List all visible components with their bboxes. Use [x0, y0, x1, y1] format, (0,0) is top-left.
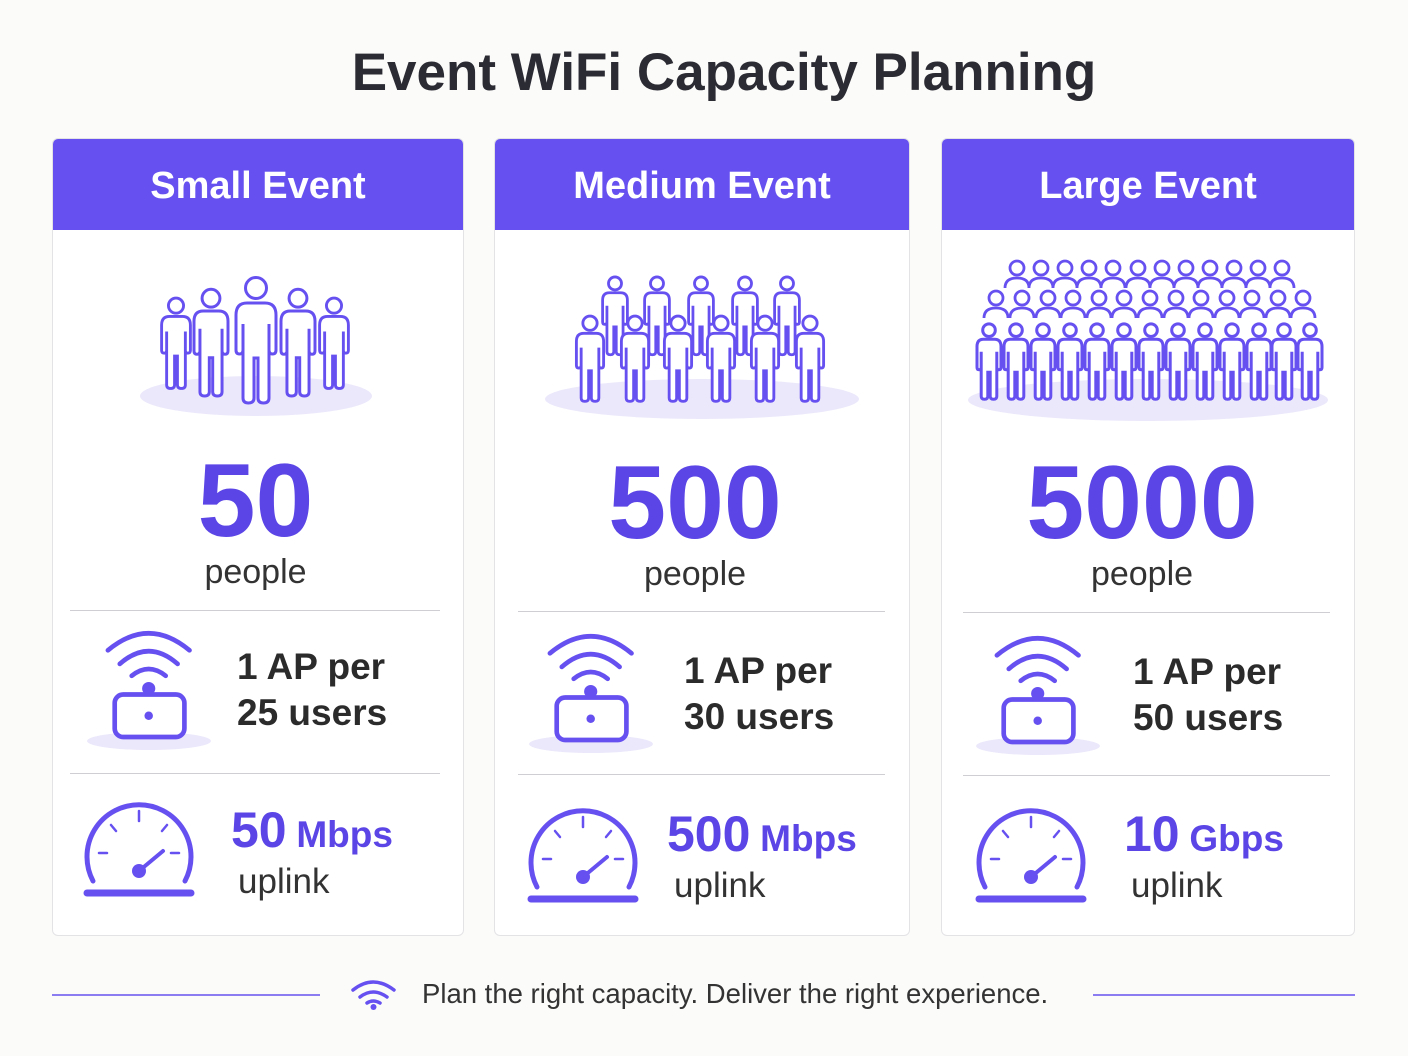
icon: access point — [87, 630, 211, 750]
icon: access point — [529, 634, 653, 753]
text: uplink: 10 Gbps — [1124, 806, 1284, 862]
text: uplink: 500 Mbps — [667, 806, 857, 862]
number: 5000 people: 5000 — [1026, 445, 1258, 561]
text: AP ratio: 50 users — [1133, 697, 1283, 738]
number: 50 people: 50 — [198, 443, 313, 559]
text: uplink: uplink — [1131, 866, 1222, 905]
icon: footer wifi — [351, 980, 396, 1010]
panel: medium event — [494, 138, 910, 936]
text: AP ratio: 1 AP per — [237, 646, 385, 687]
number: 5000 people: people — [1091, 555, 1193, 593]
icon: speed gauge — [976, 808, 1086, 902]
header: medium — [495, 139, 909, 230]
text: uplink: uplink — [674, 866, 765, 905]
text: AP ratio — [237, 646, 387, 733]
header: small: Small Event — [150, 165, 366, 207]
text: uplink — [1124, 806, 1284, 905]
header: small — [53, 139, 463, 230]
icon: speed gauge — [528, 808, 638, 902]
header: medium: Medium Event — [573, 165, 831, 207]
text: AP ratio: 1 AP per — [684, 650, 832, 691]
text: uplink: 50 Mbps — [231, 802, 393, 858]
text: AP ratio: 1 AP per — [1133, 651, 1281, 692]
text: uplink — [667, 806, 857, 905]
text: uplink — [231, 802, 393, 901]
text: AP ratio: 30 users — [684, 696, 834, 737]
panel: small event — [52, 138, 464, 936]
number: 50 people: people — [204, 553, 307, 591]
text: AP ratio: 25 users — [237, 692, 387, 733]
text: uplink: uplink — [238, 862, 329, 901]
icon: medium crowd — [545, 276, 859, 419]
header: large — [942, 139, 1354, 230]
text: AP ratio — [684, 650, 834, 737]
icon: large crowd — [968, 260, 1328, 421]
number: 500 people: people — [644, 555, 746, 593]
icon: small crowd — [140, 276, 372, 416]
footer tagline: Plan the right capacity. Deliver the right experience. — [422, 978, 1048, 1009]
header: large: Large Event — [1039, 165, 1257, 207]
icon: speed gauge — [84, 802, 194, 896]
text: AP ratio — [1133, 651, 1283, 738]
icon: access point — [976, 636, 1100, 755]
number: 500 people: 500 — [608, 445, 782, 561]
panel: large event — [941, 138, 1355, 936]
title: Event WiFi Capacity Planning — [352, 43, 1096, 102]
